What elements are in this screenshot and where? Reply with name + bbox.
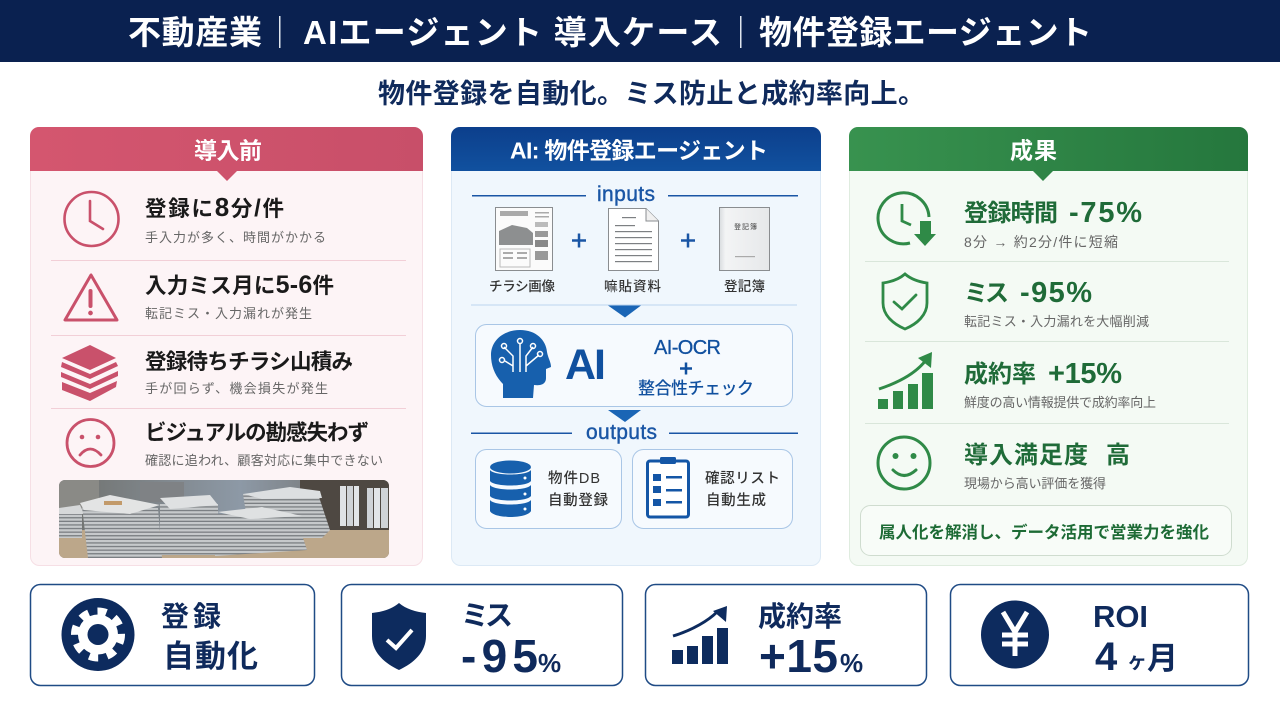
KPI card: registration automation: 登録 <box>161 601 221 632</box>
box: AI processing: AI-OCR <box>654 337 721 359</box>
row: satisfaction result: 高 <box>1106 442 1130 469</box>
row: lost intuition: 確認に追われ、顧客対応に集中できない <box>145 453 383 468</box>
icon: yen coin <box>981 600 1049 668</box>
icon: clipboard <box>648 457 688 517</box>
row: input errors: 入力ミス月に5-6件 <box>145 271 334 299</box>
section: outputs: outputs <box>586 421 657 444</box>
KPI card: ROI: ヶ <box>1127 651 1147 673</box>
row: contract rate result: +15% <box>1048 358 1122 390</box>
callout: sales strength <box>860 506 1232 556</box>
icon: growth chart <box>672 606 728 664</box>
KPI card: ROI: 月 <box>1147 641 1178 676</box>
panel header: before <box>30 127 423 181</box>
icon: shield check <box>883 274 927 329</box>
row: satisfaction result <box>878 437 1130 491</box>
box: AI processing: 整合性チェック <box>638 379 754 398</box>
row: error result: 転記ミス・入力漏れを大幅削減 <box>964 314 1149 329</box>
panel header: results: 成果 <box>1010 138 1057 164</box>
KPI card: contract rate: +15 <box>759 630 838 682</box>
title bar: 物件登録エージェント <box>759 14 1092 51</box>
row: registration time: 登録に8分/件 <box>145 192 284 222</box>
row: lost intuition <box>67 420 383 468</box>
panel: before introduction <box>30 127 423 566</box>
callout: sales strength: 属人化を解消し、データ活用で営業力を強化 <box>879 522 1210 542</box>
icon: smiling face <box>878 437 930 489</box>
input: property register: 登記簿 <box>724 278 765 294</box>
row: satisfaction result: 導入満足度 <box>964 442 1088 469</box>
photo: stacks of flyers <box>59 480 389 558</box>
output: property database: 物件DB <box>548 470 600 487</box>
row: registration time result <box>878 193 1142 250</box>
KPI card: contract rate: 成約率 <box>758 601 842 632</box>
panel header: AI agent: AI: 物件登録エージェント <box>510 138 768 164</box>
panel header: AI agent <box>451 127 821 171</box>
output: property database <box>476 450 622 528</box>
row: input errors: 転記ミス・入力漏れが発生 <box>145 306 312 321</box>
box: AI processing <box>476 324 792 406</box>
title bar: AIエージェント 導入ケース <box>303 14 722 51</box>
row: flyers piling up: 登録待ちチラシ山積み <box>145 350 353 374</box>
KPI card: contract rate: % <box>840 648 863 678</box>
output: confirmation checklist <box>632 450 792 528</box>
icon: plus <box>572 234 586 248</box>
KPI card: errors: % <box>538 648 561 678</box>
input: property register <box>720 208 770 294</box>
panel header: before: 導入前 <box>194 138 262 164</box>
KPI card: ROI: ROI <box>1093 599 1148 634</box>
input: property register: 登記簿 <box>734 222 757 231</box>
row: error result: ミス <box>964 280 1009 307</box>
KPI card: registration automation: 自動化 <box>163 639 258 674</box>
row: contract rate result: 成約率 <box>964 361 1036 388</box>
input: pasted document: 嘛貼資料 <box>604 279 662 294</box>
panel header: results <box>849 127 1248 181</box>
title bar <box>0 0 1280 62</box>
section: inputs <box>472 183 798 294</box>
row: registration time result: -75% <box>1069 197 1142 229</box>
arrow: AI to outputs <box>608 410 641 422</box>
icon: gear <box>62 598 134 671</box>
KPI card: errors <box>342 584 622 686</box>
row: registration time result: 8分 → 約2分/件に短縮 <box>964 234 1118 250</box>
KPI card: ROI: 4 <box>1095 635 1118 679</box>
KPI card: registration automation <box>30 584 314 686</box>
icon: plus <box>681 234 695 248</box>
output: confirmation checklist: 確認リスト <box>705 470 780 487</box>
icon: AI head <box>491 330 551 398</box>
panel: results <box>849 127 1248 566</box>
row: registration time result: 登録時間 <box>964 200 1058 227</box>
arrow: inputs to AI <box>608 306 641 318</box>
icon: clock with down arrow <box>878 193 936 246</box>
row: error result: -95% <box>1020 277 1092 309</box>
icon: warning triangle <box>65 275 117 320</box>
KPI card: contract rate <box>646 584 926 686</box>
panel: AI agent <box>451 127 821 566</box>
row: error result <box>883 274 1149 329</box>
subtitle: 物件登録を自動化。ミス防止と成約率向上。 <box>378 79 925 109</box>
row: flyers piling up <box>61 345 353 401</box>
row: lost intuition: ビジュアルの勘感失わず <box>145 420 369 445</box>
row: input errors <box>65 271 334 321</box>
row: registration time: 手入力が多く、時間がかかる <box>145 230 326 245</box>
box: AI processing: AI <box>565 341 606 389</box>
icon: database <box>490 460 531 517</box>
icon: paper stack <box>61 345 118 401</box>
KPI card: ROI <box>950 584 1248 686</box>
section: inputs: inputs <box>597 183 655 206</box>
row: contract rate result <box>878 352 1156 410</box>
title bar: 不動産業 <box>128 14 262 51</box>
row: registration time <box>64 192 326 246</box>
input: flyer image <box>489 208 556 294</box>
icon: sad face <box>67 420 114 466</box>
icon: growth chart <box>878 352 933 409</box>
row: satisfaction result: 現場から高い評価を獲得 <box>964 476 1106 491</box>
row: contract rate result: 鮮度の高い情報提供で成約率向上 <box>964 395 1156 410</box>
section: outputs <box>471 421 798 528</box>
KPI card: errors: -95 <box>461 630 538 682</box>
icon: clock <box>64 192 118 246</box>
KPI card: errors: ミス <box>461 600 513 631</box>
row: flyers piling up: 手が回らず、機会損失が発生 <box>145 381 328 396</box>
input: pasted document <box>604 208 662 294</box>
output: property database: 自動登録 <box>548 492 608 509</box>
icon: shield <box>372 603 426 670</box>
output: confirmation checklist: 自動生成 <box>706 492 766 509</box>
input: flyer image: チラシ画像 <box>489 279 556 294</box>
